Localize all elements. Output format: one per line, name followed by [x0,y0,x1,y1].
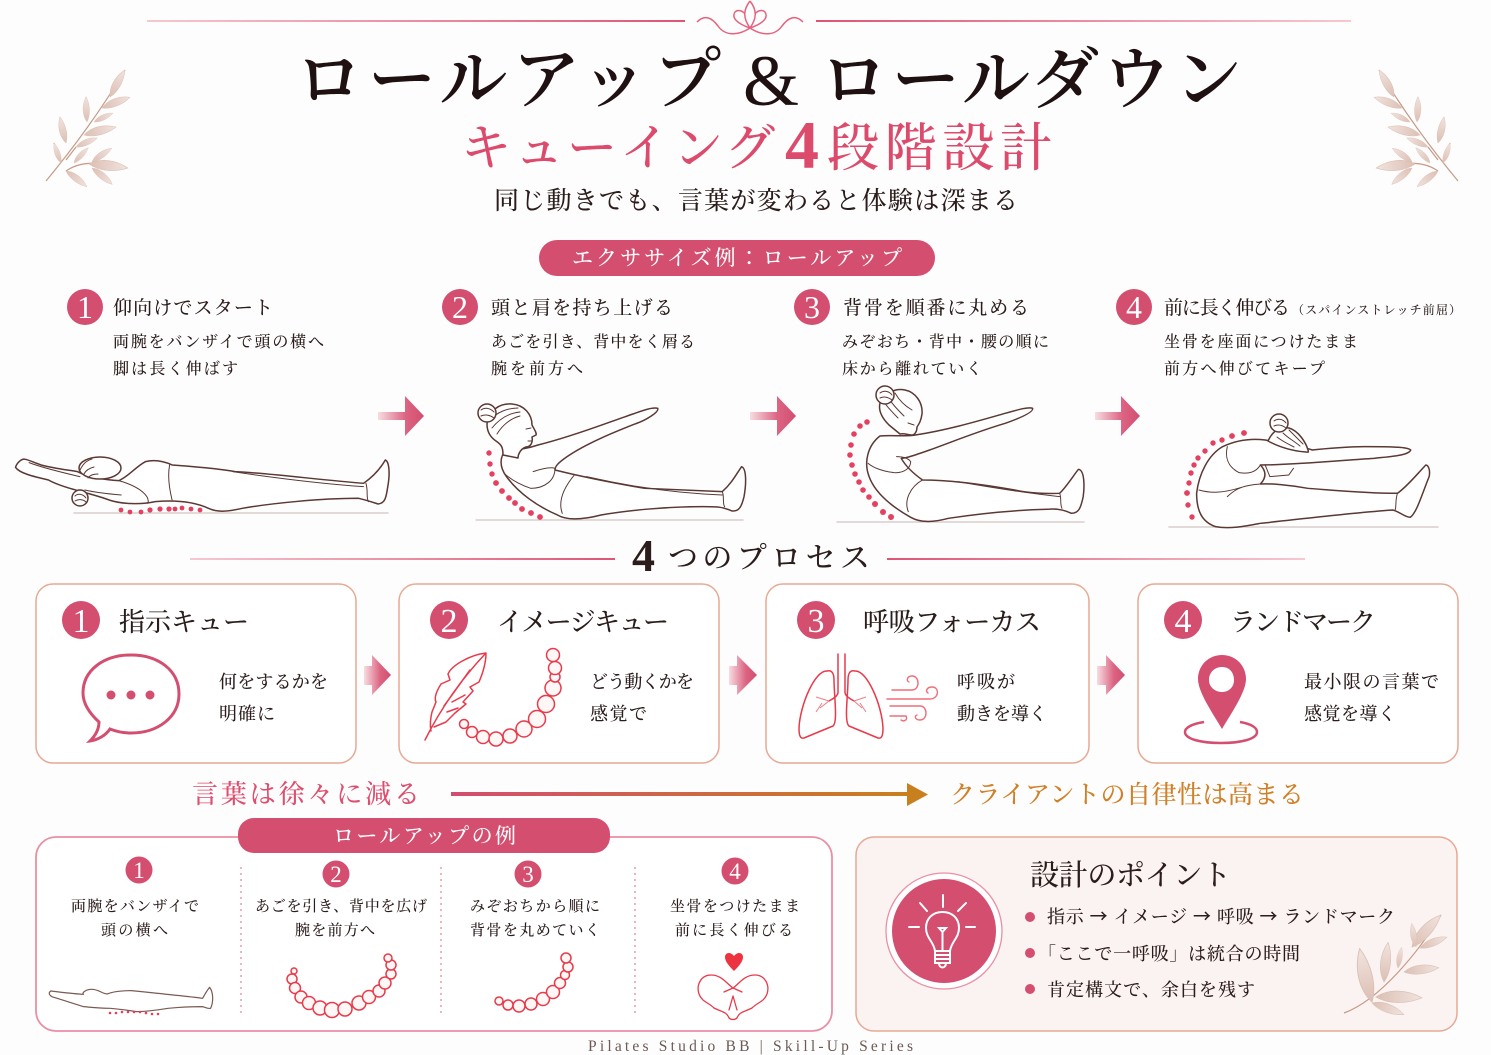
icon: pelvis [698,975,768,1020]
subtitle: 段階設計 [827,121,1052,178]
step 3: 背骨を順番に丸める [843,297,1029,319]
card 4: landmark [1138,584,1458,763]
card 3: breath focus: 呼吸が [957,672,1015,692]
icon: feather [425,653,486,740]
step 2: あごを引き、背中をく屑る [491,333,695,351]
step 1: 仰向けでスタート [113,297,273,319]
figure: lying supine [16,457,389,514]
example 4: 前に長く伸びる [675,922,793,939]
figure: spine rolling up [837,386,1084,522]
arrow: card 1 to 2 [364,655,391,695]
step 4: 4 [1126,289,1142,325]
step 2: 頭と肩を持ち上げる [491,297,673,319]
icon: map pin [1185,655,1257,743]
icon: spine beads [460,648,562,746]
card 4: landmark: ランドマーク [1230,608,1376,637]
arrow: card 2 to 3 [729,655,757,695]
example 3: 3 [522,862,534,887]
card 3: breath focus [766,584,1089,763]
card 2: image cue [399,584,719,763]
card 3: breath focus: 動きを導く [957,703,1047,724]
title: ロールアップ [295,42,721,118]
card 4: landmark: 最小限の言葉で [1304,672,1439,692]
panel: design points: 設計のポイント [1030,859,1231,892]
icon: heart [725,953,743,971]
step 4: 前方へ伸びてキープ [1164,360,1325,378]
step 2: 腕を前方へ [491,360,583,378]
example 2: あごを引き、背中を広げ [255,897,427,915]
point 1: 指示 → イメージ → 呼吸 → ランドマーク [1047,903,1395,929]
arrow: step 3 to 4 [1095,396,1140,436]
example 1: 両腕をバンザイで [71,898,199,915]
section heading: 4 processes [190,530,1305,581]
panel: design points [856,837,1457,1031]
figure: spine stretch forward [1169,414,1438,528]
step 3 [794,289,1049,378]
panel heading pill: ロールアップの例 [333,824,516,848]
step 1: 両腕をバンザイで頭の横へ [113,333,324,351]
card 2: image cue: 感覚で [590,704,647,724]
arrow: step 2 to 3 [750,396,796,436]
decorative sprig: top left [46,68,131,189]
icon: lungs [799,654,883,738]
subtitle [461,107,1052,183]
step 2 [442,289,695,378]
arrow: card 3 to 4 [1097,655,1125,695]
card 2: image cue: 2 [440,603,458,640]
example 1 [49,856,213,1015]
icon: wind [887,676,937,721]
title [295,41,1242,121]
pill: exercise example: エクササイズ例：ロールアップ [572,246,902,270]
example 4 [670,858,800,1020]
example 2: 腕を前方へ [295,921,375,939]
step 4: （スパインストレッチ前屈） [1292,303,1461,317]
example 1: 1 [133,858,145,883]
icon: light bulb badge [886,873,1002,989]
example 3: 背骨を丸めていく [470,921,600,939]
title: & [743,41,799,121]
point 3: 肯定構文で、余白を残す [1047,979,1255,1000]
subtitle: 4 [785,107,819,183]
icon: speech bubble [83,655,179,741]
card 3: breath focus: 呼吸フォーカス [863,608,1041,637]
example 2: 2 [330,862,342,887]
example 3 [470,860,600,1012]
card 1: instruction cue: 指示キュー [119,608,249,637]
decorative sprig: top right [1373,68,1458,189]
step 1: 1 [77,289,93,325]
card 4: landmark: 感覚を導く [1304,703,1396,724]
example 4: 4 [729,859,741,884]
step 4 [1116,289,1461,378]
step 1 [67,289,324,378]
top ornament [147,1,1351,34]
point 2: 「ここで一呼吸」は統合の時間 [1038,944,1300,964]
step 3: みぞおち・背中・腰の順に [842,333,1049,351]
section heading: 4 processes: つのプロセス [668,542,870,575]
step 3: 床から離れていく [842,359,982,378]
panel heading pill [238,818,610,853]
example 1: 頭の横へ [101,921,168,939]
card 3: breath focus: 3 [808,603,824,640]
card 1: instruction cue: 何をするかを [219,672,328,692]
step 4: 前に長く伸びる [1164,297,1290,319]
card 4: landmark: 4 [1174,603,1192,640]
decorative sprig [1344,911,1448,1018]
tagline: 同じ動きでも、言葉が変わると体験は深まる [494,187,1018,215]
step 4: 坐骨を座面につけたまま [1164,333,1358,351]
step 1: 脚は長く伸ばす [113,360,238,378]
step 2: 2 [452,289,468,325]
example 3: みぞおちから順に [470,898,600,915]
card 1: instruction cue [36,584,356,763]
progression arrow [451,783,928,806]
card 2: image cue: どう動くかを [590,672,694,692]
step 3: 3 [804,289,820,325]
example 2 [255,860,427,1018]
footer credit: Pilates Studio BB | Skill-Up Series [588,1038,913,1055]
arrow: step 1 to 2 [378,396,424,436]
panel: roll-up examples [36,818,832,1031]
progression: client autonomy increases: クライアントの自律性は高まる [950,781,1304,809]
progression: words decrease: 言葉は徐々に減る [192,780,420,809]
card 1: instruction cue: 1 [72,603,90,640]
figure: head and shoulders lifted [476,404,746,520]
example 4: 坐骨をつけたまま [670,898,800,915]
title: ロールダウン [820,42,1242,118]
subtitle: キューイング [461,120,775,176]
pill: exercise example [539,240,935,276]
card 2: image cue: イメージキュー [497,608,669,637]
section heading: 4 processes: 4 [632,530,655,581]
card 1: instruction cue: 明確に [219,704,275,724]
